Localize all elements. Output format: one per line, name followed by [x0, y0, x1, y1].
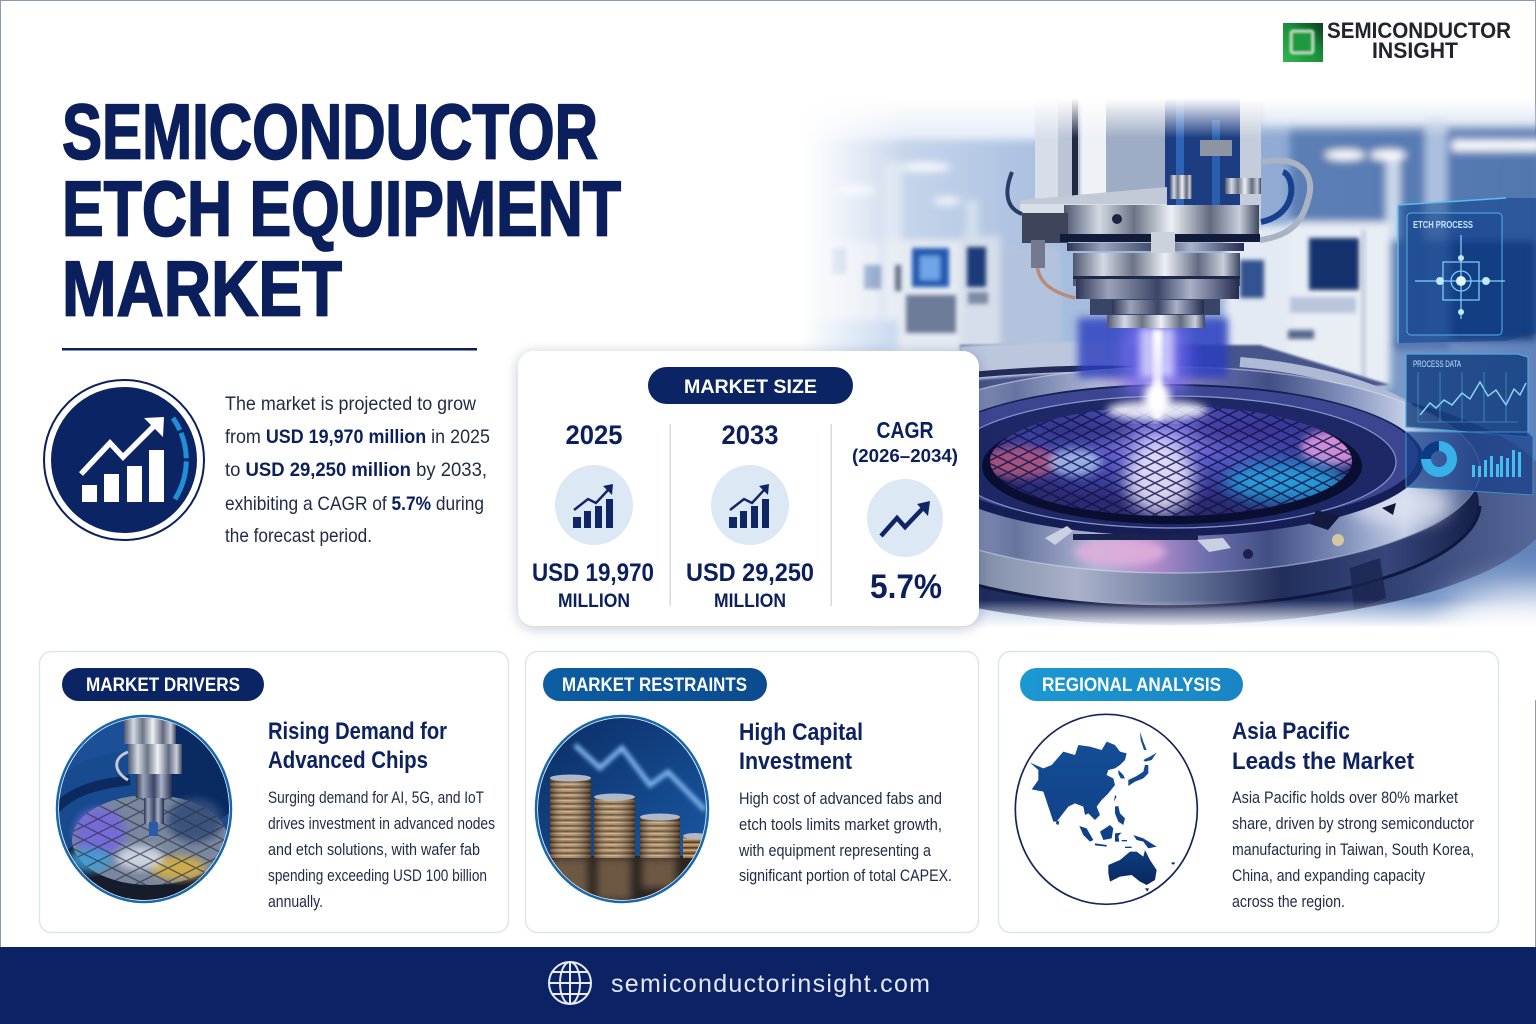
heading: asia pacific: Asia Pacific — [1232, 718, 1350, 745]
body: regional: Asia Pacific holds over 80% market — [1232, 788, 1458, 807]
logo text: INSIGHT — [1372, 38, 1459, 63]
heading: rising demand: Rising Demand for — [268, 718, 447, 745]
title — [62, 88, 621, 332]
body: drivers: spending exceeding USD 100 billion — [268, 866, 487, 885]
website: semiconductorinsight.com — [611, 970, 930, 998]
heading: asia pacific: Leads the Market — [1232, 748, 1414, 775]
drivers pill — [62, 668, 264, 701]
title: SEMICONDUCTOR — [62, 88, 598, 176]
plasma beam — [1078, 318, 1228, 420]
market size pill: MARKET SIZE — [684, 377, 817, 398]
drivers pill: MARKET DRIVERS — [86, 675, 240, 696]
body: regional: across the region. — [1232, 892, 1345, 911]
intro text: from USD 19,970 million in 2025 — [225, 426, 490, 448]
heading: asia pacific — [1232, 718, 1414, 775]
panel: process data: PROCESS DATA — [1413, 359, 1461, 369]
factory background — [815, 103, 1536, 626]
heading: high capital — [739, 719, 863, 775]
stat: 2033: 2033 — [722, 420, 778, 450]
heading: high capital: Investment — [739, 748, 852, 775]
logo text: SEMICONDUCTOR — [1327, 18, 1511, 43]
stat: 2033: USD 29,250 — [686, 559, 814, 587]
stat: CAGR: CAGR — [876, 417, 934, 443]
body: drivers: drives investment in advanced nodes — [268, 814, 495, 833]
stat: 2025 — [532, 420, 654, 612]
logo — [1283, 18, 1511, 63]
title: MARKET — [62, 244, 342, 332]
body: drivers: Surging demand for AI, 5G, and IoT — [268, 788, 484, 807]
body: regional: manufacturing in Taiwan, South Korea, — [1232, 840, 1474, 859]
intro text: to USD 29,250 million by 2033, — [225, 459, 487, 481]
footer band — [0, 947, 1536, 1024]
restraints pill — [543, 668, 767, 701]
body: restraints — [738, 789, 952, 885]
panel: market drivers — [40, 652, 508, 932]
heading: rising demand: Advanced Chips — [268, 747, 428, 774]
hero image: etch chamber and wafer — [780, 80, 1536, 700]
body: regional — [1232, 788, 1474, 911]
stat: 2033 — [686, 420, 814, 612]
panel: etch process — [1398, 198, 1536, 343]
map: Asia Pacific globe — [1015, 714, 1197, 904]
body: regional: China, and expanding capacity — [1232, 866, 1425, 885]
body: restraints: etch tools limits market growth, — [739, 815, 942, 834]
process stage — [958, 342, 1536, 625]
panel: regional analysis — [998, 652, 1498, 932]
logo text — [1327, 18, 1511, 63]
body: drivers — [268, 788, 495, 911]
heading: high capital: High Capital — [739, 719, 863, 746]
back rim — [958, 343, 1390, 389]
stat: CAGR: 5.7% — [870, 568, 942, 606]
stat: 2025: MILLION — [558, 591, 630, 612]
panel: donut and bars — [1406, 432, 1533, 495]
regional pill — [1020, 668, 1243, 701]
stage hardware — [1045, 526, 1231, 552]
etch tool column — [1007, 90, 1310, 328]
wafer — [980, 400, 1370, 520]
base platter — [979, 402, 1536, 625]
intro text — [225, 393, 490, 547]
bright lower-right fade — [1440, 585, 1536, 665]
intro text: exhibiting a CAGR of 5.7% during — [225, 493, 484, 515]
body: regional: share, driven by strong semiconductor — [1232, 814, 1474, 833]
regional pill: REGIONAL ANALYSIS — [1042, 675, 1221, 696]
panel: market size — [518, 351, 979, 626]
body: restraints: High cost of advanced fabs and — [739, 789, 942, 808]
icon: globe — [549, 962, 591, 1004]
market size pill — [648, 367, 853, 404]
stat: CAGR: (2026–2034) — [852, 446, 958, 466]
body: restraints: with equipment representing a — [738, 841, 931, 860]
intro text: The market is projected to grow — [225, 393, 477, 415]
stat: 2033: MILLION — [714, 591, 786, 612]
panel: process data — [1406, 354, 1528, 437]
stat: CAGR — [852, 417, 958, 606]
hologram panels — [1398, 198, 1536, 495]
stat: 2025: USD 19,970 — [532, 559, 654, 587]
heading: rising demand — [268, 718, 447, 774]
panel: market restraints — [526, 652, 978, 932]
restraints pill: MARKET RESTRAINTS — [562, 675, 747, 696]
body: drivers: annually. — [268, 892, 323, 911]
recess rings — [979, 384, 1423, 536]
top surface — [979, 368, 1474, 573]
image: coin stacks — [534, 714, 710, 904]
wall — [979, 488, 1479, 606]
image: etch tool over wafer — [56, 714, 232, 904]
icon: chip logo — [1283, 23, 1323, 62]
panel: etch process: ETCH PROCESS — [1413, 220, 1473, 231]
body: restraints: significant portion of total CAPEX. — [739, 866, 952, 885]
stat: 2025: 2025 — [566, 420, 622, 450]
intro text: the forecast period. — [225, 525, 372, 547]
body: drivers: and etch solutions, with wafer fab — [268, 840, 480, 859]
title: ETCH EQUIPMENT — [62, 164, 621, 252]
icon: growth chart badge — [44, 380, 204, 540]
